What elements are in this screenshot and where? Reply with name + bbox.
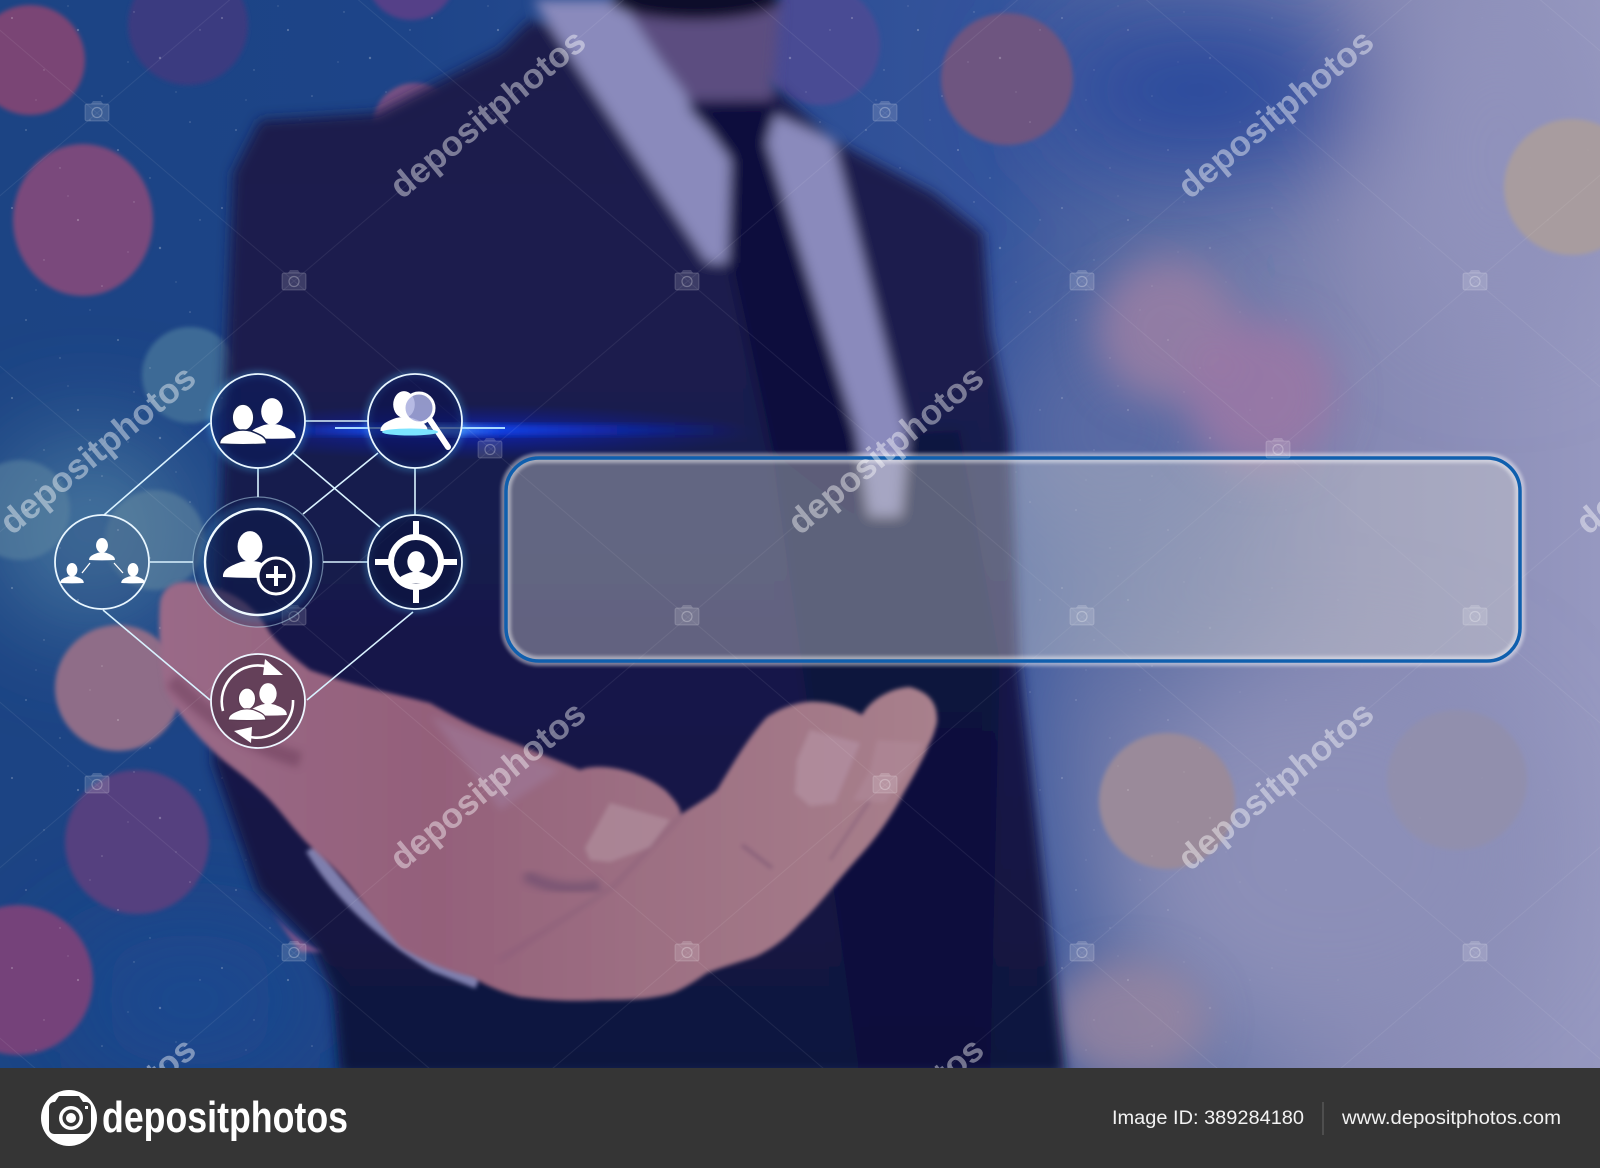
thumb-palm fold — [172, 680, 300, 760]
watermark logos: depositphotos — [382, 694, 593, 878]
finger shadow — [500, 815, 682, 960]
connector lines — [103, 421, 415, 700]
person in suit — [159, 0, 1065, 1075]
watermark logos: depositphotos — [780, 358, 991, 542]
small camera marks — [85, 101, 1487, 961]
footer bar — [0, 1068, 1600, 1168]
glass text box — [506, 458, 1520, 661]
watermark logos: depositphotos — [1170, 694, 1381, 878]
footer logo: depositphotos — [102, 1093, 348, 1142]
pink sliver — [260, 895, 322, 952]
shirt right strip — [767, 115, 907, 515]
node: search person — [368, 374, 462, 468]
node: add person — [193, 497, 323, 627]
fingernails — [585, 803, 670, 862]
node glows — [202, 374, 462, 618]
watermark logos: depositphotos — [1170, 22, 1381, 206]
footer logo — [41, 1090, 348, 1146]
neck — [620, 0, 780, 100]
website: www.depositphotos.com — [1341, 1108, 1561, 1129]
head shadow — [610, 0, 780, 20]
soft pink blobs — [1050, 258, 1338, 1080]
image id: Image ID: 389284180 — [1112, 1108, 1304, 1129]
node: target — [368, 515, 462, 609]
network diagram — [55, 374, 462, 748]
node: team — [211, 374, 305, 468]
jacket darker front — [730, 143, 1000, 1075]
open hand — [159, 582, 937, 1001]
node: hierarchy — [55, 515, 149, 609]
shirt left collar — [533, 0, 730, 263]
watermark logos: depositphotos — [382, 22, 593, 206]
shirt cuff — [312, 848, 478, 982]
tie — [687, 100, 860, 520]
node: rotate team — [211, 654, 305, 748]
highlight upper palm — [430, 715, 560, 810]
suit jacket — [213, 20, 1065, 1075]
lens flare — [180, 404, 760, 460]
